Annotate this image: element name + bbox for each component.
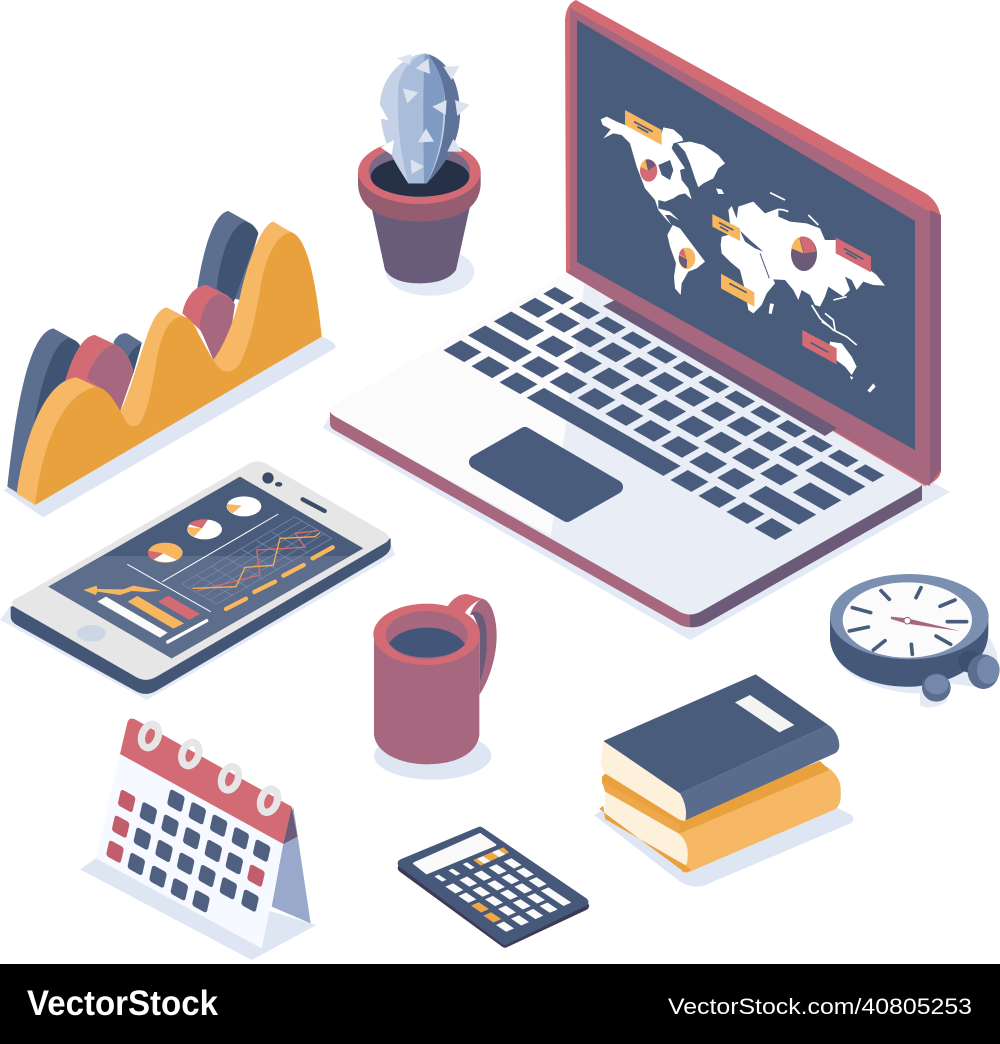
calendar rings: [138, 722, 281, 815]
calendar day cells: [106, 789, 271, 913]
touchpad: [476, 434, 616, 515]
calculator: [400, 831, 590, 948]
upper book: [601, 674, 839, 821]
keyboard: [443, 286, 886, 540]
lower book: [599, 761, 841, 873]
stopwatch: [830, 574, 1000, 708]
cactus body: [378, 53, 470, 183]
image id: VectorStock.com/40805253: [668, 994, 972, 1019]
wave chart: [3, 211, 336, 517]
footer bar: [0, 964, 1000, 1044]
laptop: [323, 0, 950, 640]
phone screen: [48, 472, 363, 658]
laptop screen: [565, 0, 941, 486]
world map: [601, 110, 885, 393]
Eurasia and Africa: [721, 193, 885, 393]
books: [594, 674, 853, 887]
desk calendar: [80, 719, 317, 960]
coffee mug: [373, 594, 497, 780]
calculator keys: [434, 847, 571, 932]
brand name: VectorStock: [27, 984, 219, 1023]
cactus in pot: [358, 53, 481, 296]
map labels and pies: [625, 110, 871, 364]
smartphone: [0, 461, 395, 700]
